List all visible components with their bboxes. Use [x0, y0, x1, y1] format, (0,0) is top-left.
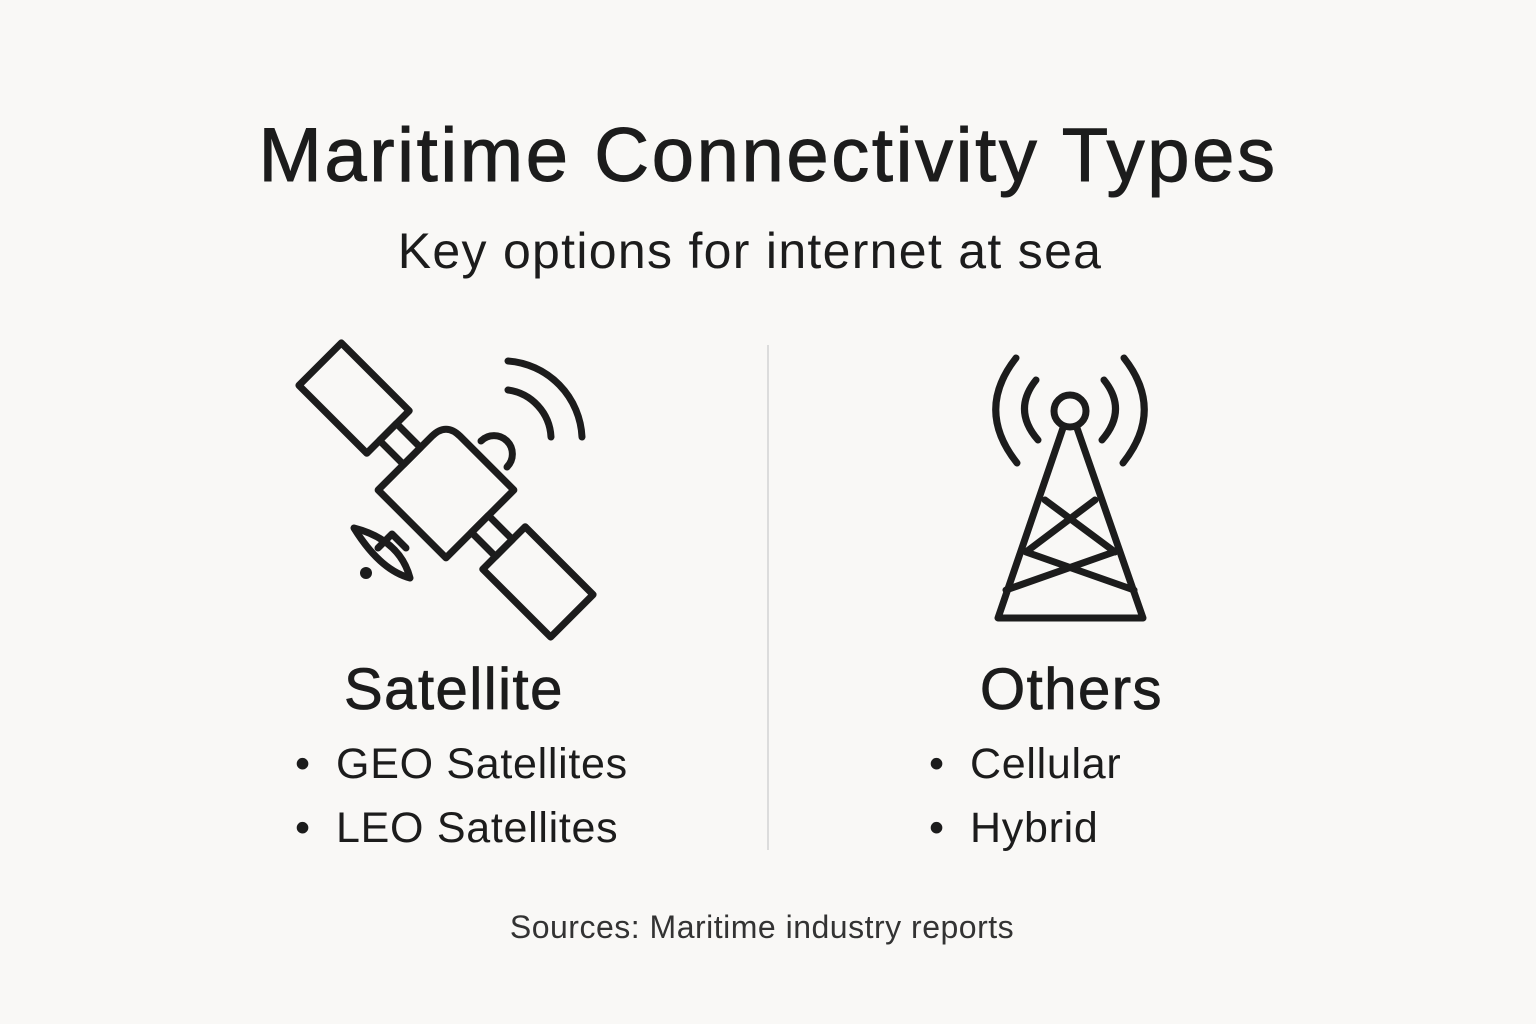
list: others: • Hybrid — [929, 804, 1099, 852]
heading: others: Others — [980, 657, 1163, 722]
title: Maritime Connectivity Types — [258, 113, 1278, 198]
sources: Sources: Maritime industry reports — [510, 909, 1014, 945]
bump — [481, 436, 512, 467]
list: others: • Cellular — [929, 740, 1121, 788]
list: satellite: • GEO Satellites — [295, 740, 628, 788]
list: others — [929, 740, 1121, 852]
list: satellite: • LEO Satellites — [295, 804, 618, 852]
list: satellite — [295, 740, 628, 852]
subtitle: Key options for internet at sea — [398, 223, 1102, 279]
dish — [354, 528, 410, 578]
heading: satellite: Satellite — [344, 657, 564, 722]
divider — [767, 345, 769, 850]
signal arcs — [508, 390, 551, 437]
